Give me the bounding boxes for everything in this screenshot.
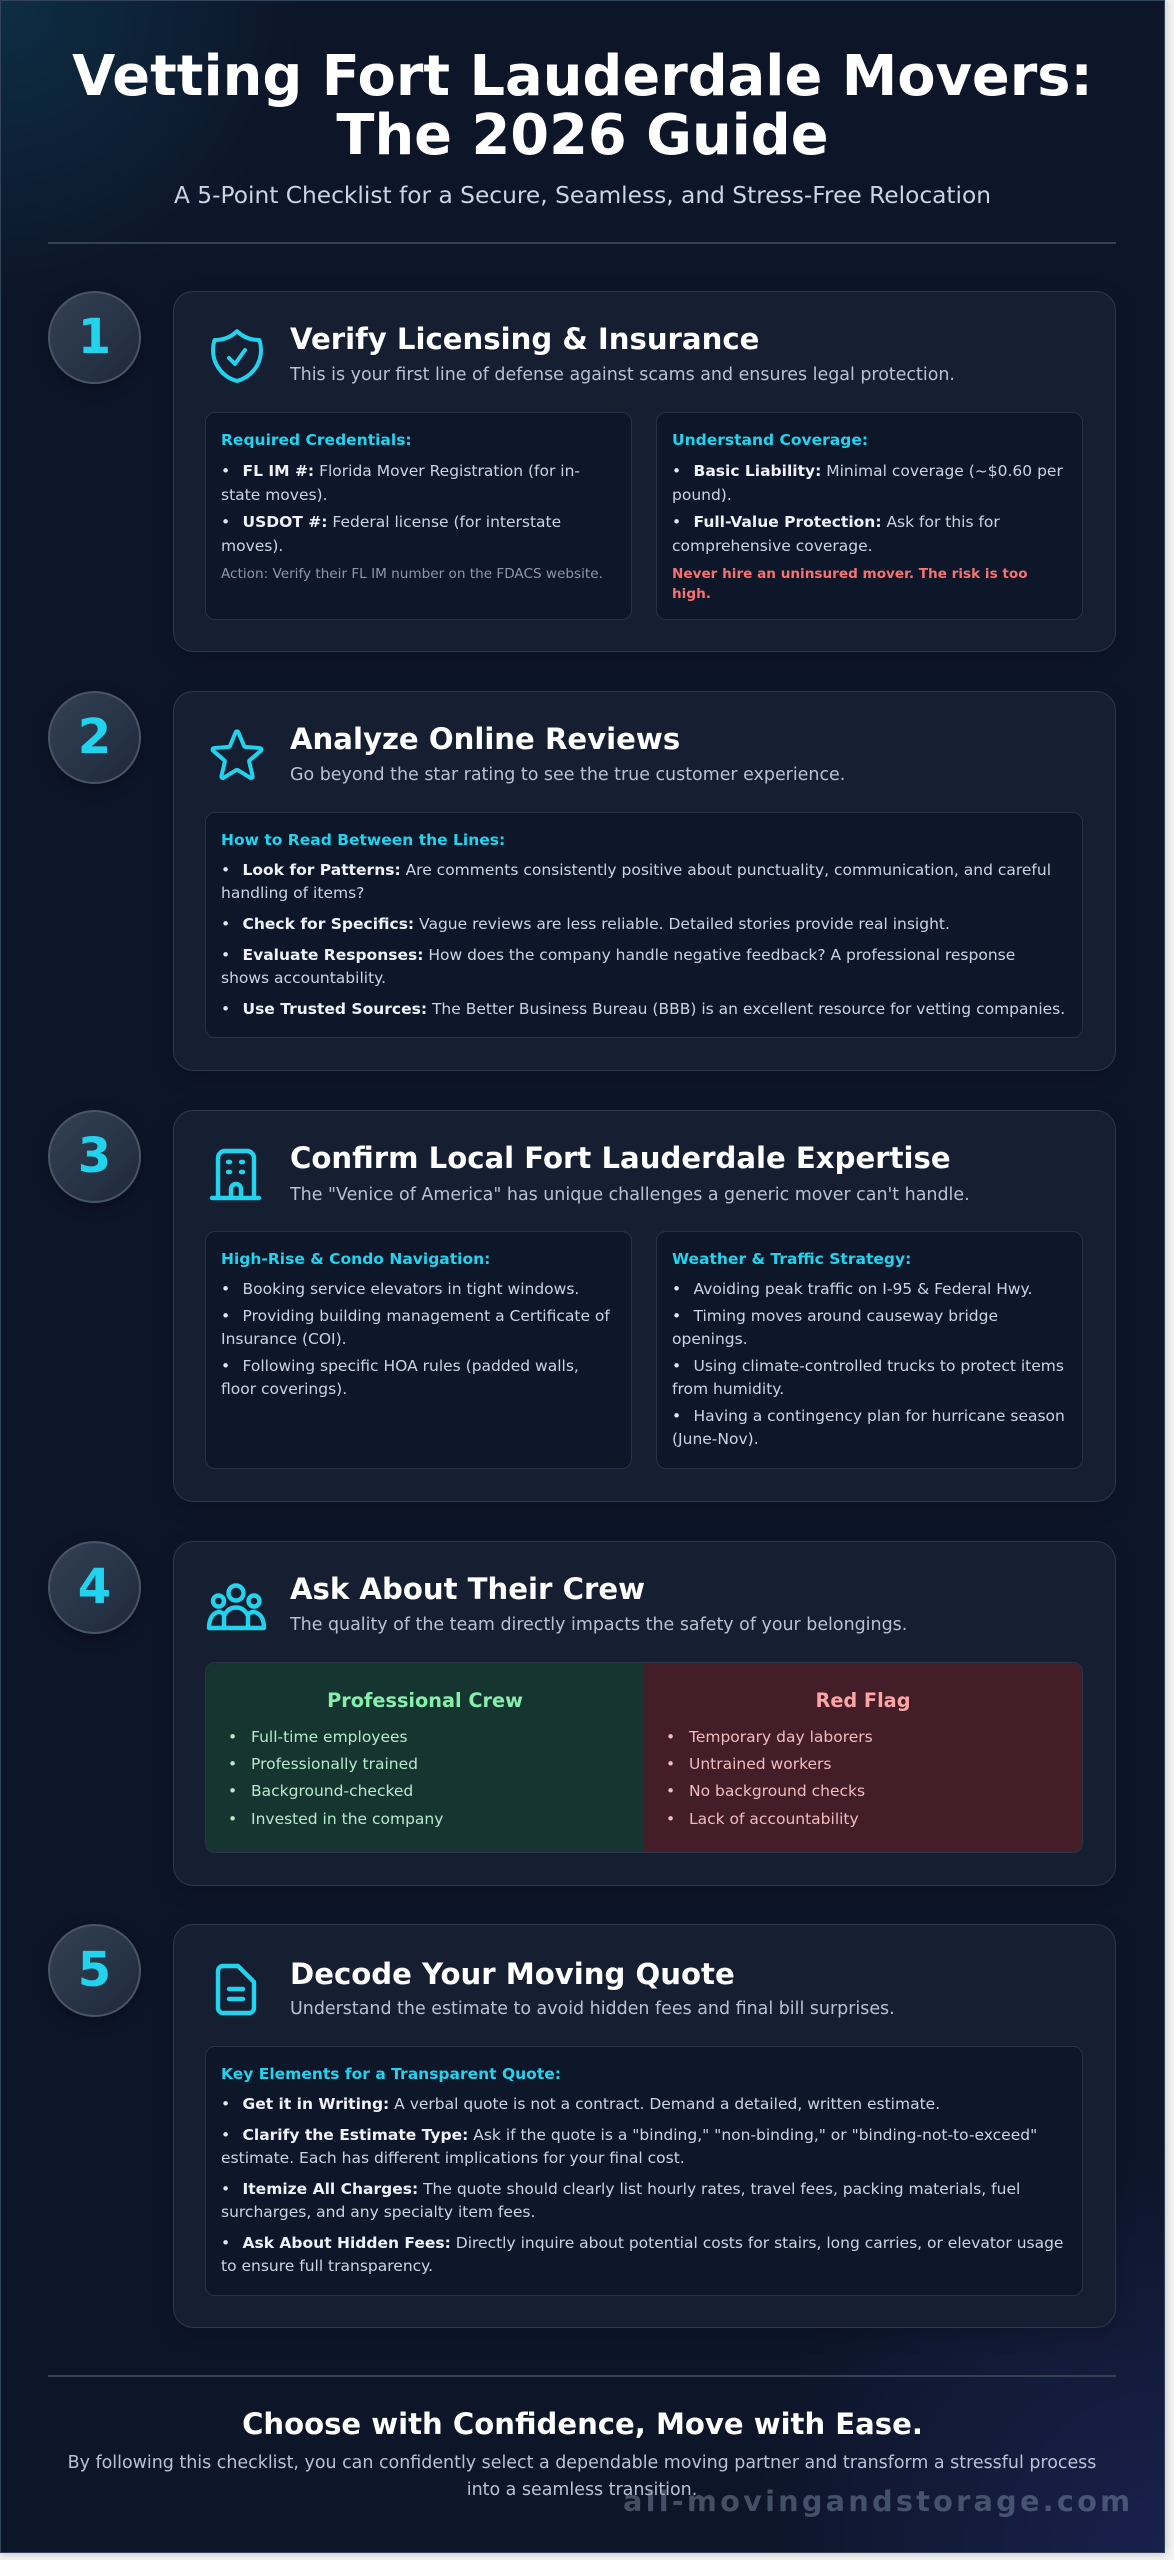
column: red flag: Untrained workers — [689, 1755, 832, 1773]
step number 4: 4 — [78, 1559, 111, 1615]
box: high-rise and condo navigation: floor coverings). — [221, 1380, 347, 1398]
box: weather and traffic strategy: Weather & Traffic Strategy: — [672, 1250, 911, 1268]
step number 5 — [48, 1924, 141, 2017]
heading: Analyze Online Reviews — [290, 722, 680, 756]
comparison panel — [205, 1662, 1083, 1853]
column: professional crew: Professional Crew — [327, 1689, 523, 1712]
box: required credentials: • — [221, 513, 230, 531]
heading: Decode Your Moving Quote — [290, 1957, 735, 1991]
box: weather and traffic strategy — [656, 1231, 1083, 1469]
box: high-rise and condo navigation: High-Rise & Condo Navigation: — [221, 1250, 490, 1268]
warning: Never hire an uninsured mover. The risk is too — [672, 566, 1028, 582]
column: red flag: No background checks — [689, 1782, 865, 1800]
box: read between the lines: handling of items? — [221, 884, 364, 902]
watermark: all-movingandstorage.com — [623, 2484, 1133, 2518]
step number 1 — [48, 291, 141, 384]
column: red flag: Red Flag — [815, 1689, 911, 1712]
box: key elements: surcharges, and any specialty item fees. — [221, 2203, 535, 2221]
column: professional crew: Background-checked — [251, 1782, 413, 1800]
box: read between the lines: Use Trusted Sources: The Better Business Bureau (BBB) is an excellent resource for vetting companies. — [242, 1000, 1065, 1018]
box: read between the lines — [205, 812, 1083, 1038]
box: understand coverage — [656, 412, 1083, 620]
box: read between the lines: Look for Patterns: Are comments consistently positive about punctuality, communication, and careful — [242, 861, 1051, 879]
title — [72, 44, 1093, 168]
box: required credentials: state moves). — [221, 486, 328, 504]
column: red flag: Lack of accountability — [689, 1810, 859, 1828]
box: weather and traffic strategy: • — [672, 1307, 681, 1325]
box: required credentials: • — [221, 462, 230, 480]
title: Vetting Fort Lauderdale Movers: — [72, 44, 1093, 109]
box: weather and traffic strategy: Using climate-controlled trucks to protect items — [694, 1357, 1064, 1375]
column: professional crew: Full-time employees — [251, 1728, 408, 1746]
box: weather and traffic strategy: Timing moves around causeway bridge — [694, 1307, 998, 1325]
box: required credentials — [205, 412, 632, 620]
warning: high. — [672, 586, 711, 602]
box: understand coverage: Basic Liability: Minimal coverage (~$0.60 per — [694, 462, 1063, 480]
box: read between the lines: • — [221, 1000, 230, 1018]
box: key elements: Itemize All Charges: The quote should clearly list hourly rates, travel fees, packing materials, fuel — [242, 2180, 1020, 2198]
panel: decode your moving quote — [173, 1924, 1116, 2328]
warning — [672, 566, 1028, 602]
box: read between the lines: • — [221, 915, 230, 933]
box: weather and traffic strategy: Having a contingency plan for hurricane season — [694, 1407, 1065, 1425]
box: read between the lines: Evaluate Responses: How does the company handle negative feedback? A professional response — [242, 946, 1015, 964]
box: key elements: • — [221, 2180, 230, 2198]
box: high-rise and condo navigation — [205, 1231, 632, 1469]
box: high-rise and condo navigation: • — [221, 1307, 230, 1325]
box: key elements: • — [221, 2126, 230, 2144]
box: read between the lines: • — [221, 946, 230, 964]
icon: building — [210, 1148, 262, 1200]
box: key elements: to ensure full transparency. — [221, 2257, 433, 2275]
icon: document — [216, 1964, 256, 2016]
box: read between the lines: shows accountability. — [221, 969, 386, 987]
heading: Ask About Their Crew — [290, 1572, 645, 1606]
panel: verify licensing and insurance — [173, 291, 1116, 652]
box: weather and traffic strategy: Avoiding peak traffic on I-95 & Federal Hwy. — [694, 1280, 1032, 1298]
box: high-rise and condo navigation: Providing building management a Certificate of — [242, 1307, 610, 1325]
box: required credentials: Required Credentials: — [221, 431, 412, 449]
closing heading: Choose with Confidence, Move with Ease. — [242, 2407, 923, 2441]
step number 3: 3 — [78, 1128, 111, 1184]
box: high-rise and condo navigation: • — [221, 1280, 230, 1298]
heading: Verify Licensing & Insurance — [290, 322, 759, 356]
description: The "Venice of America" has unique challenges a generic mover can't handle. — [290, 1185, 970, 1205]
description: This is your first line of defense against scams and ensures legal protection. — [290, 365, 955, 385]
box: weather and traffic strategy: openings. — [672, 1330, 748, 1348]
box: read between the lines: • — [221, 861, 230, 879]
panel: local expertise — [173, 1110, 1116, 1502]
box: required credentials: moves). — [221, 537, 283, 555]
action note: Action: Verify their FL IM number on the FDACS website. — [221, 566, 603, 582]
closing text — [68, 2453, 1096, 2500]
step number 2: 2 — [78, 709, 111, 765]
box: understand coverage: comprehensive coverage. — [672, 537, 873, 555]
box: understand coverage: pound). — [672, 486, 732, 504]
box: high-rise and condo navigation: Booking service elevators in tight windows. — [242, 1280, 579, 1298]
title: The 2026 Guide — [336, 103, 829, 168]
step number 4 — [48, 1541, 141, 1634]
description: Understand the estimate to avoid hidden fees and final bill surprises. — [290, 1999, 895, 2019]
box: understand coverage: • — [672, 513, 681, 531]
description: The quality of the team directly impacts the safety of your belongings. — [290, 1615, 907, 1635]
box: key elements: Get it in Writing: A verbal quote is not a contract. Demand a detailed, written estimate. — [242, 2095, 940, 2113]
box: key elements: • — [221, 2234, 230, 2252]
box: read between the lines: How to Read Between the Lines: — [221, 831, 505, 849]
column: professional crew — [206, 1663, 644, 1852]
box: key elements: Key Elements for a Transparent Quote: — [221, 2065, 561, 2083]
box: key elements: Clarify the Estimate Type: Ask if the quote is a "binding," "non-binding," or "binding-not-to-exceed" — [242, 2126, 1037, 2144]
panel: ask about their crew — [173, 1541, 1116, 1886]
icon: star — [210, 729, 264, 780]
box: understand coverage: Understand Coverage: — [672, 431, 868, 449]
column: professional crew: Invested in the company — [251, 1810, 443, 1828]
column: red flag — [644, 1663, 1082, 1852]
description: Go beyond the star rating to see the true customer experience. — [290, 765, 845, 785]
box: high-rise and condo navigation: Insurance (COI). — [221, 1330, 347, 1348]
box: weather and traffic strategy: • — [672, 1357, 681, 1375]
box: required credentials: USDOT #: Federal license (for interstate — [242, 513, 561, 531]
icon: crew group — [206, 1583, 266, 1630]
step number 2 — [48, 691, 141, 784]
column: red flag: Temporary day laborers — [689, 1728, 873, 1746]
step number 3 — [48, 1110, 141, 1203]
subtitle: A 5-Point Checklist for a Secure, Seamless, and Stress-Free Relocation — [174, 182, 991, 209]
step number 5: 5 — [78, 1942, 111, 1998]
box: key elements: Ask About Hidden Fees: Directly inquire about potential costs for stairs, long carries, or elevator usage — [242, 2234, 1063, 2252]
column: professional crew: Professionally trained — [251, 1755, 418, 1773]
box: weather and traffic strategy: from humidity. — [672, 1380, 784, 1398]
box: key elements: estimate. Each has different implications for your final cost. — [221, 2149, 685, 2167]
box: key elements: • — [221, 2095, 230, 2113]
box: required credentials: FL IM #: Florida Mover Registration (for in- — [242, 462, 580, 480]
heading: Confirm Local Fort Lauderdale Expertise — [290, 1141, 951, 1175]
step number 1: 1 — [78, 309, 111, 365]
box: read between the lines: Check for Specifics: Vague reviews are less reliable. Detailed stories provide real insight. — [242, 915, 950, 933]
box: weather and traffic strategy: (June-Nov). — [672, 1430, 759, 1448]
closing text: By following this checklist, you can confidently select a dependable moving partner and transform a stressful process — [68, 2453, 1096, 2473]
box: high-rise and condo navigation: Following specific HOA rules (padded walls, — [242, 1357, 579, 1375]
box: weather and traffic strategy: • — [672, 1280, 681, 1298]
box: high-rise and condo navigation: • — [221, 1357, 230, 1375]
closing text: into a seamless transition. — [467, 2480, 697, 2500]
box: understand coverage: Full-Value Protection: Ask for this for — [694, 513, 1000, 531]
box: weather and traffic strategy: • — [672, 1407, 681, 1425]
box: understand coverage: • — [672, 462, 681, 480]
box: key elements — [205, 2046, 1083, 2296]
icon: shield check — [211, 329, 263, 383]
panel: analyze online reviews — [173, 691, 1116, 1071]
